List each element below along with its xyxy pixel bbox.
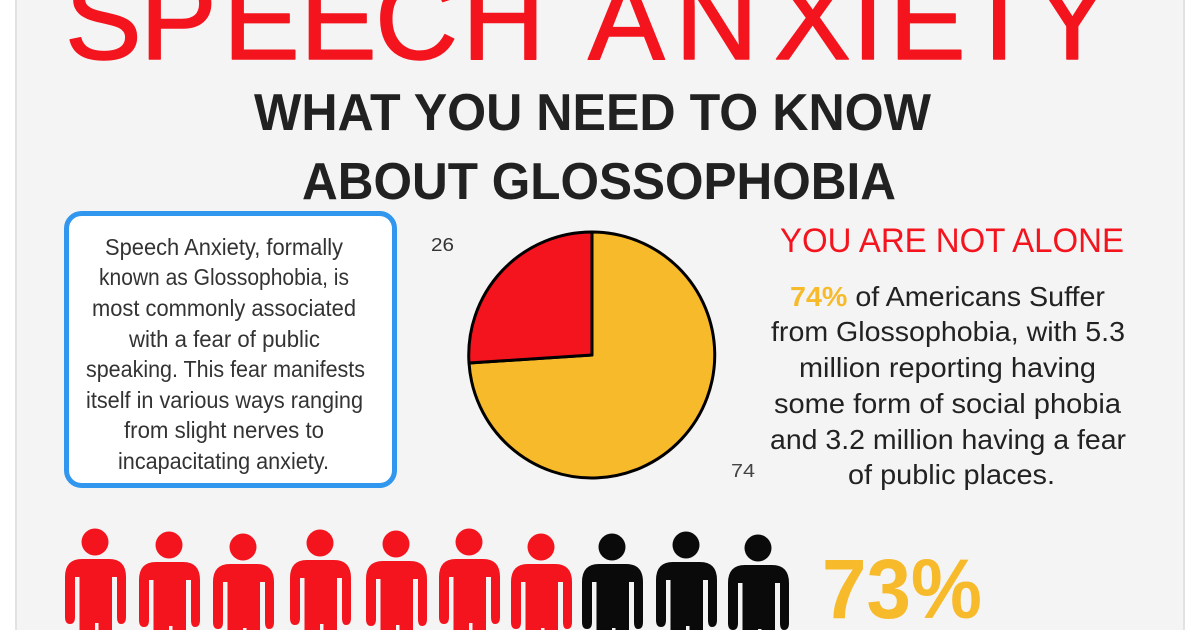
text: definition: Speech Anxiety, formally	[105, 234, 343, 260]
pie slice: 26	[469, 232, 592, 363]
text: statistics: and 3.2 million having a fear	[770, 424, 1126, 455]
pie label: 74: 74	[731, 461, 755, 481]
icon row: people	[65, 528, 789, 630]
heading	[254, 84, 932, 211]
text: statistics: of public places.	[848, 459, 1055, 490]
heading: ABOUT GLOSSOPHOBIA	[302, 153, 896, 211]
pie label: 26: 26	[431, 235, 454, 255]
pie slice: 74	[469, 232, 715, 478]
icon: person red 2	[139, 532, 200, 630]
heading: WHAT YOU NEED TO KNOW	[254, 84, 932, 142]
icon: person red 7	[511, 534, 572, 630]
pie chart	[469, 232, 715, 478]
text: statistics: some form of social phobia	[774, 388, 1121, 419]
icon: person red 5	[366, 530, 427, 630]
icon: person red 3	[213, 534, 274, 630]
text: definition: from slight nerves to	[124, 417, 324, 443]
icon: person red 6	[439, 528, 500, 630]
text: definition: itself in various ways ranging	[86, 387, 363, 413]
text: statistics	[770, 281, 1126, 490]
text: definition: incapacitating anxiety.	[118, 448, 329, 474]
text: definition: with a fear of public	[128, 326, 320, 352]
icon: person black 10	[728, 534, 789, 630]
icon: person red 4	[290, 530, 351, 630]
text: statistics: 74% of Americans Suffer	[790, 281, 1105, 312]
heading: you are not alone: YOU ARE NOT ALONE	[780, 222, 1124, 260]
text: statistics: from Glossophobia, with 5.3	[771, 316, 1125, 347]
panel: definition box	[66, 214, 394, 486]
text: statistics: million reporting having	[799, 352, 1096, 383]
icon: person red 1	[65, 528, 126, 630]
text: definition: known as Glossophobia, is	[99, 264, 349, 290]
text: definition: most commonly associated	[92, 295, 356, 321]
icon: person black 8	[582, 534, 643, 630]
text: definition	[86, 234, 365, 474]
text: definition: speaking. This fear manifests	[86, 356, 365, 382]
icon: person black 9	[656, 532, 717, 630]
